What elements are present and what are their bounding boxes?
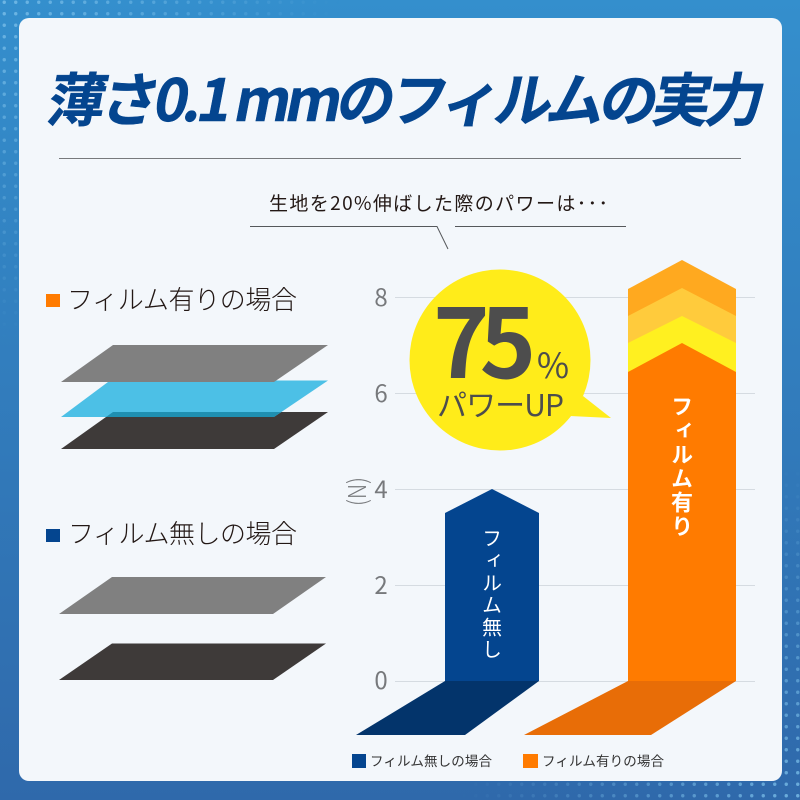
y axis labels: 2 (374, 566, 388, 601)
bar chart (338, 260, 755, 735)
legend item: without film: フィルム無しの場合 (370, 750, 492, 770)
panel: with film (46, 280, 328, 449)
subtitle speech-line pointer (250, 226, 626, 249)
bar: with film (524, 260, 736, 735)
y axis labels: 4 (374, 470, 388, 505)
callout: 75% power up: パワーUP (437, 381, 564, 425)
panel: without film (46, 514, 326, 680)
diagram: three layers with film (61, 345, 328, 449)
callout: 75% power up: 75 (433, 267, 532, 406)
y axis labels: 6 (374, 374, 388, 409)
diagram: two layers without film (59, 577, 326, 680)
heading: without film: フィルム無しの場合 (68, 514, 297, 551)
callout: 75% power up (410, 267, 611, 450)
y axis labels: 8 (374, 278, 388, 313)
heading: with film: フィルム有りの場合 (67, 280, 297, 317)
callout: 75% power up: % (537, 338, 569, 389)
bar: with film: フィルム有り (666, 395, 698, 539)
bar: without film: フィルム無し (478, 528, 506, 661)
y axis labels: 0 (374, 661, 388, 696)
bar: without film (356, 489, 539, 735)
legend item: with film: フィルム有りの場合 (542, 750, 664, 770)
title: 薄さ0.1 mmのフィルムの実力 (42, 54, 774, 138)
subtitle: 生地を20%伸ばした際のパワーは･･･ (269, 189, 608, 216)
y axis unit: (N) (338, 477, 374, 506)
y axis labels (374, 278, 388, 696)
legend (352, 750, 664, 770)
